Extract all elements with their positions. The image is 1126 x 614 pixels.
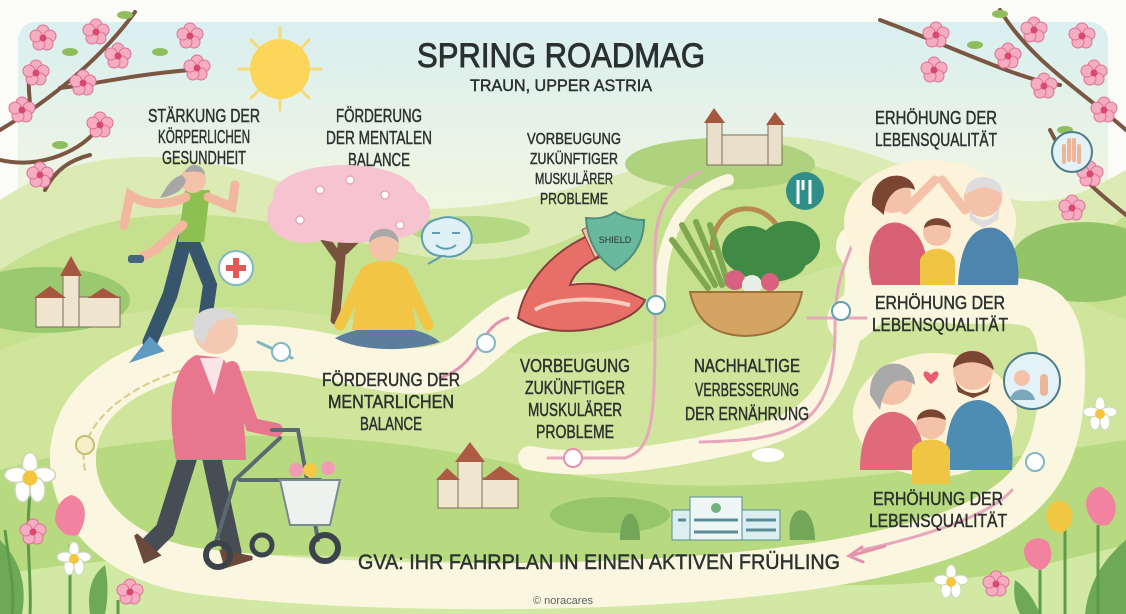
left blossom branches <box>0 11 210 190</box>
heading: mentale Balance: DER MENTALEN <box>326 128 432 148</box>
label: mentale Balance lower: FÖRDERUNG DER <box>322 370 460 390</box>
icon: medical cross <box>219 251 253 285</box>
label: muskuläre Probleme lower: MUSKULÄRER <box>528 400 622 420</box>
label: Ernährung <box>685 356 809 424</box>
label: muskuläre Probleme lower: PROBLEME <box>536 422 614 442</box>
icon: shield: SHIELD <box>599 235 632 245</box>
landscape hills <box>0 136 1126 614</box>
castle left <box>34 256 120 327</box>
title: TRAUN, UPPER ASTRIA <box>470 76 653 95</box>
heading: körperliche Gesundheit: GESUNDHEIT <box>162 148 246 168</box>
heading: Lebensqualität top: ERHÖHUNG DER <box>875 108 997 128</box>
heading: körperliche Gesundheit: KÖRPERLICHEN <box>158 127 250 147</box>
label: Lebensqualität lower: LEBENSQUALITÄT <box>869 511 1007 531</box>
footer slogan: GVA: IHR FAHRPLAN IN EINEN AKTIVEN FRÜHLING <box>358 551 840 574</box>
blossom tree <box>267 165 430 320</box>
heading: mentale Balance: BALANCE <box>348 150 410 170</box>
heading: Lebensqualität top: LEBENSQUALITÄT <box>875 130 997 150</box>
route markers <box>76 296 1044 471</box>
heading: Lebensqualität top <box>875 108 997 150</box>
vegetable basket <box>672 209 820 336</box>
heading: mentale Balance <box>326 106 432 170</box>
icon: shield <box>586 212 644 270</box>
heading: muskuläre Probleme: VORBEUGUNG <box>527 131 621 148</box>
label: Lebensqualität middle: ERHÖHUNG DER <box>875 293 1005 313</box>
castle bottom <box>436 442 520 508</box>
label: Ernährung: DER ERNÄHRUNG <box>685 404 809 424</box>
title <box>417 37 705 95</box>
label: Ernährung: VERBESSERUNG <box>695 380 799 400</box>
heading: mentale Balance: FÖRDERUNG <box>336 106 422 126</box>
right blossom branches <box>880 10 1126 220</box>
right foreground flowers <box>934 397 1126 614</box>
left foreground flowers <box>0 452 143 614</box>
label: mentale Balance lower: MENTARLICHEN <box>328 392 454 412</box>
label: muskuläre Probleme lower <box>520 356 630 442</box>
label: Lebensqualität middle: LEBENSQUALITÄT <box>872 315 1008 335</box>
label: mentale Balance lower <box>322 370 460 434</box>
heading: muskuläre Probleme: PROBLEME <box>540 191 608 208</box>
clinic building <box>620 448 815 540</box>
family portrait lower <box>853 350 1017 484</box>
rollator with flower basket <box>206 430 340 567</box>
label: Lebensqualität lower <box>869 489 1007 531</box>
label: muskuläre Probleme lower: VORBEUGUNG <box>520 356 630 376</box>
copyright: © noracares <box>533 595 594 607</box>
family high five portrait <box>844 160 1018 285</box>
flexed arm illustration <box>518 226 645 331</box>
label: mentale Balance lower: BALANCE <box>360 414 422 434</box>
icon: hand bubble <box>1052 132 1092 172</box>
label: Lebensqualität middle <box>872 293 1008 335</box>
heading: muskuläre Probleme: ZUKÜNFTIGER <box>530 150 618 168</box>
runner woman <box>124 165 235 358</box>
sun <box>239 28 321 110</box>
castle top <box>704 108 785 165</box>
heading: körperliche Gesundheit: STÄRKUNG DER <box>148 106 260 126</box>
label: Lebensqualität lower: ERHÖHUNG DER <box>873 489 1003 509</box>
elderly woman with rollator <box>136 308 276 566</box>
heading: körperliche Gesundheit <box>148 106 260 168</box>
arrow to slogan <box>849 546 885 562</box>
label: muskuläre Probleme lower: ZUKÜNFTIGER <box>525 378 625 398</box>
icon: video call bubble <box>1004 353 1060 409</box>
title: SPRING ROADMAG <box>417 37 705 75</box>
winding cream path <box>73 172 1062 586</box>
meditating woman <box>335 229 440 349</box>
label: Ernährung: NACHHALTIGE <box>694 356 800 376</box>
heading: muskuläre Probleme <box>527 131 621 208</box>
heading: muskuläre Probleme: MUSKULÄRER <box>535 170 613 188</box>
icon: cutlery <box>786 172 824 210</box>
icon: calm face bubble <box>422 217 472 264</box>
